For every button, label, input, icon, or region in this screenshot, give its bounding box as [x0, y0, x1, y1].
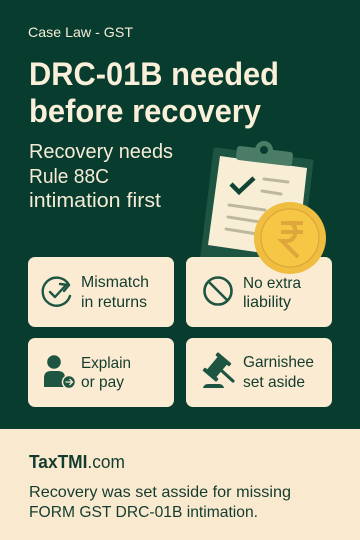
icon: prohibition sign	[204, 278, 232, 304]
card text	[243, 354, 314, 391]
title: before recovery	[29, 93, 261, 129]
card text	[243, 275, 301, 311]
title: DRC-01B needed	[29, 56, 279, 92]
card text: Mismatch	[81, 274, 149, 291]
title	[29, 56, 279, 129]
footer text: FORM GST DRC-01B intimation.	[29, 504, 258, 521]
card: mismatch in returns	[28, 257, 174, 327]
icon: gavel	[202, 352, 233, 388]
card text: in returns	[81, 294, 147, 311]
card text: or pay	[81, 374, 124, 391]
card text: Explain	[81, 355, 131, 372]
icon: rupee coin	[254, 202, 326, 274]
brand: TaxTMI.com: TaxTMI.com	[29, 452, 125, 472]
card text: No extra	[243, 275, 301, 292]
subtitle: Rule 88C	[29, 166, 109, 188]
icon: clipboard	[202, 141, 312, 262]
card text: liability	[243, 294, 291, 311]
footer text	[29, 484, 291, 521]
card text: Garnishee	[243, 354, 314, 371]
subtitle	[29, 141, 173, 212]
card text	[81, 274, 149, 311]
footer panel	[0, 429, 360, 540]
kicker: Case Law - GST: Case Law - GST	[28, 24, 133, 40]
card: garnishee set aside	[186, 338, 332, 407]
card text	[81, 355, 131, 391]
card: explain or pay	[28, 338, 174, 407]
card text: set aside	[243, 374, 305, 391]
footer text: Recovery was set asside for missing	[29, 484, 291, 501]
subtitle: Recovery needs	[29, 141, 173, 163]
icon: mismatch check	[43, 278, 70, 306]
card: no extra liability	[186, 257, 332, 327]
icon: person with arrow	[44, 355, 76, 388]
subtitle: intimation first	[29, 190, 161, 212]
